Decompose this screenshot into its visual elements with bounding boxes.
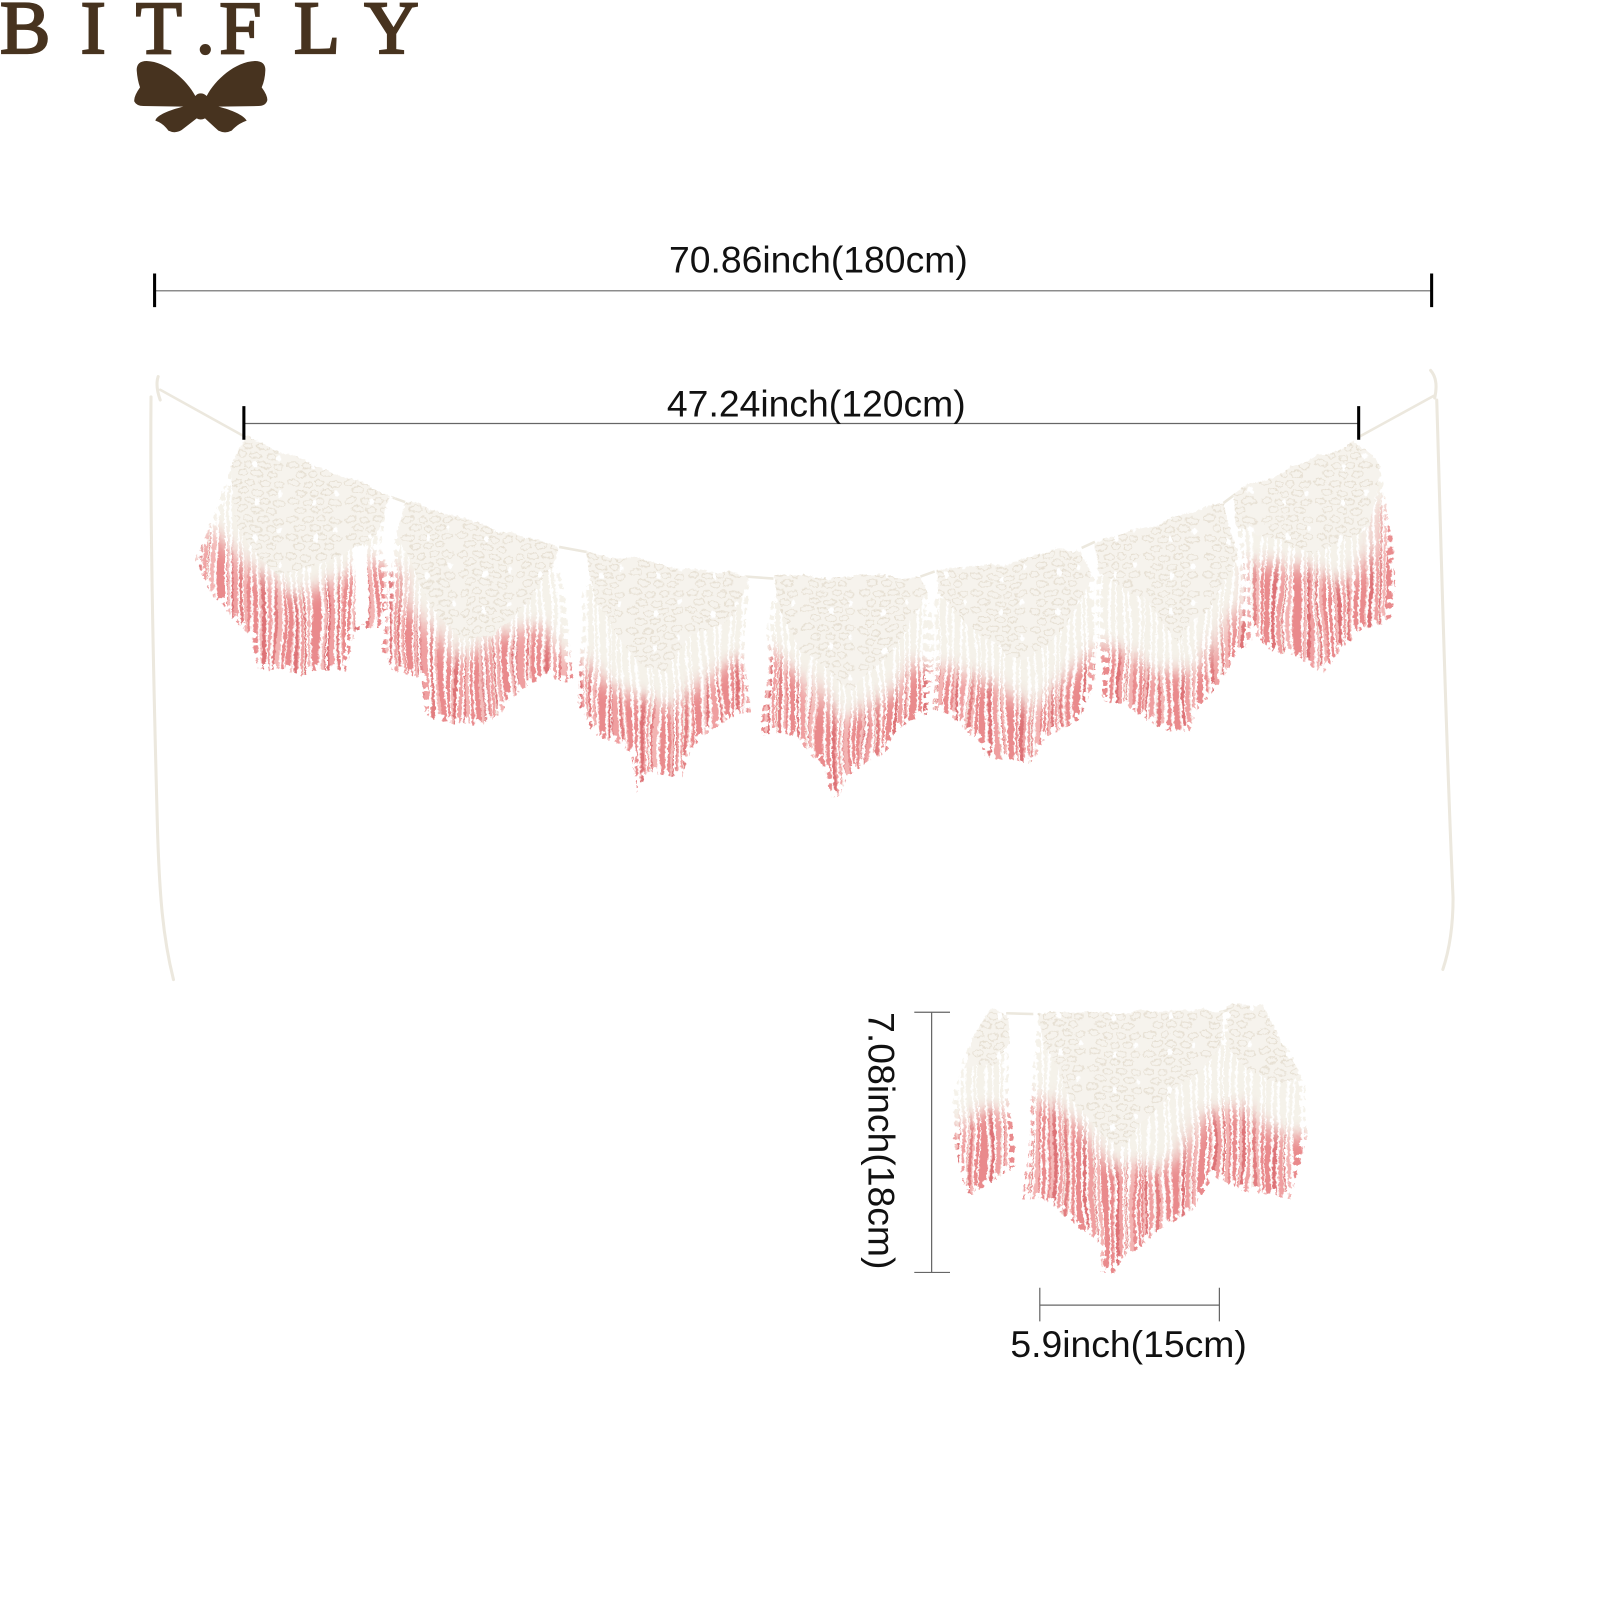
- icon: bow: [134, 61, 267, 132]
- inset cord: [1006, 1010, 1228, 1014]
- dimension: total length 70.86inch: 70.86inch(180cm): [669, 238, 968, 280]
- pennant 1: [195, 437, 397, 676]
- dimension: width 47.24inch: 47.24inch(120cm): [667, 382, 966, 424]
- dimension: height 7.08inch: 7.08inch(18cm): [860, 1012, 902, 1269]
- dimension: panel width 5.9inch: 5.9inch(15cm): [1010, 1323, 1247, 1365]
- pennant 7: [1236, 440, 1398, 671]
- pennant 5: [930, 548, 1102, 762]
- dimension: height 7.08inch: [860, 1012, 950, 1272]
- dimension: width 47.24inch: [244, 382, 1359, 440]
- connecting cord: [391, 494, 1236, 579]
- pennant 2: [382, 502, 571, 727]
- inset main pennant: [1023, 1005, 1305, 1273]
- inset: single pennant detail: [952, 1005, 1305, 1273]
- dimension: total length 70.86inch: [154, 238, 1432, 307]
- inset left pennant piece: [952, 1008, 1013, 1195]
- pennant 6: [1095, 503, 1253, 734]
- hanging rope: right: [1359, 370, 1453, 969]
- hanging rope: left: [151, 377, 245, 980]
- pennant 4: [762, 577, 937, 797]
- dimension: panel width 5.9inch: [1010, 1288, 1247, 1365]
- garland: macrame bunting: [151, 370, 1453, 980]
- pennant 3: [577, 552, 753, 790]
- logo: BIT.FLY brand: [0, 0, 419, 132]
